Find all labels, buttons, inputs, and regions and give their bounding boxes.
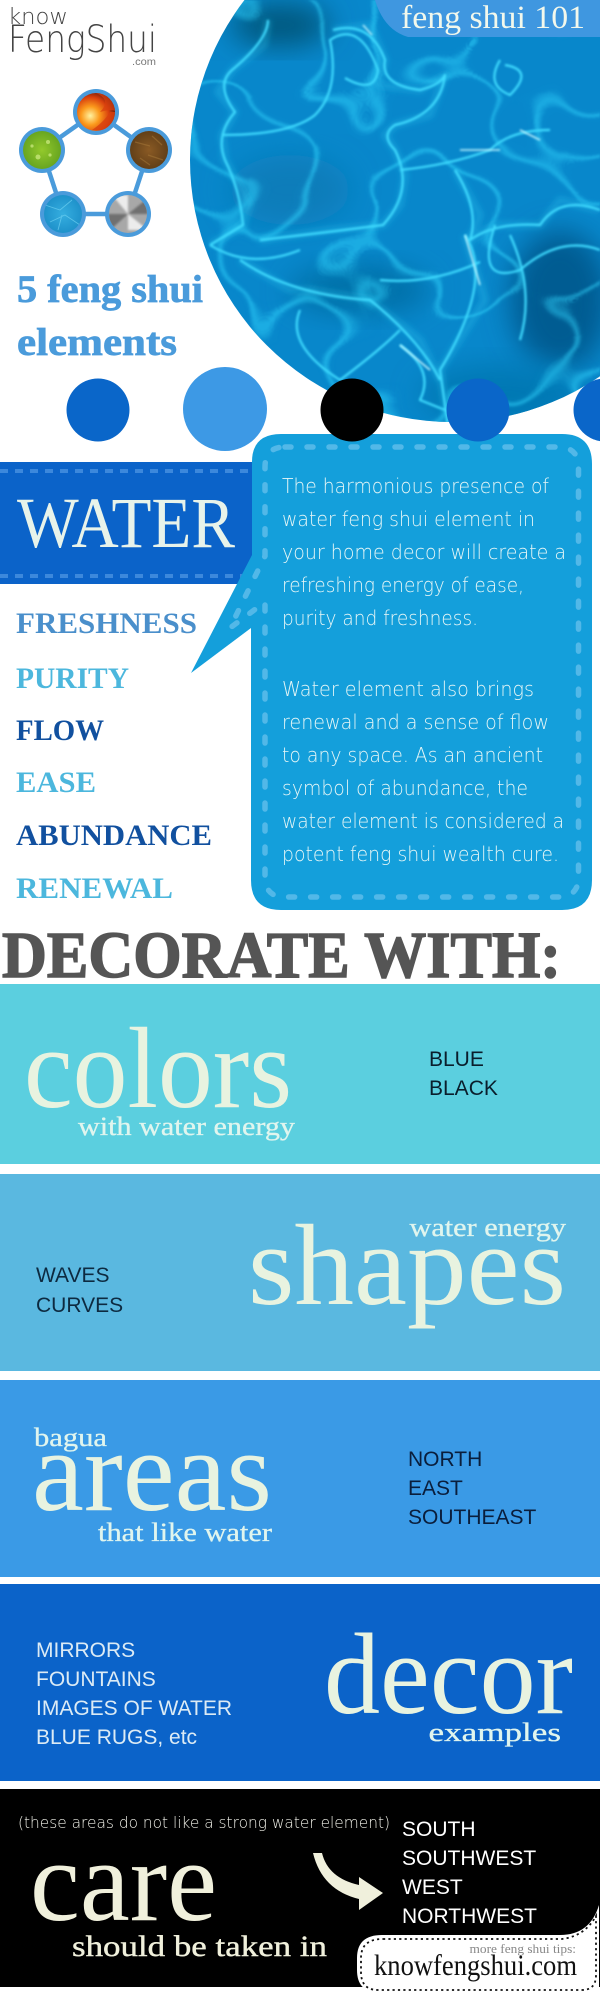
panel: colors: BLACK [429,1077,498,1100]
badge: more tips: more feng shui tips: [470,1941,576,1956]
icon: fire [73,89,119,135]
text: bubble paragraphs: The harmonious presence of [282,474,549,498]
logo: know FengShui: .com [132,57,156,68]
arrow: curved [313,1853,383,1910]
panel: decor: FOUNTAINS [36,1668,156,1691]
panel: colors [0,984,600,1164]
panel: areas: that like water [98,1518,272,1547]
tag: feng shui 101: feng shui 101 [401,0,585,36]
badge: more tips: knowfengshui.com [374,1949,577,1982]
panel: care: NORTHWEST [402,1905,537,1928]
text: bubble paragraphs: symbol of abundance, the [282,776,528,800]
list: water qualities: FLOW [16,714,104,747]
text: bubble paragraphs: potent feng shui wealth cure. [282,842,559,866]
text: bubble paragraphs: Water element also brings [282,677,534,701]
panel: areas: NORTH [408,1448,482,1471]
logo: know FengShui [8,5,157,68]
icon: water [40,191,86,237]
list: water qualities: FRESHNESS [16,607,197,640]
title: 5 feng shui elements: 5 feng shui [17,268,203,311]
speech bubble panel [191,434,592,910]
banner: WATER: WATER [17,483,235,563]
panel: care: SOUTHWEST [402,1847,536,1870]
decorative dots row [66,367,600,451]
logo: know FengShui: FengShui [8,18,157,61]
panel: areas: SOUTHEAST [408,1506,537,1529]
panel: decor: IMAGES OF WATER [36,1697,232,1720]
panel: decor: decor [324,1611,573,1738]
panel: colors: colors [24,1005,292,1132]
list: water qualities: EASE [16,766,96,799]
panel: areas [0,1380,600,1577]
panel: colors: BLUE [429,1048,484,1071]
panel: shapes: CURVES [36,1294,123,1317]
panel: decor: MIRRORS [36,1639,135,1662]
panel: areas: bagua [34,1423,108,1452]
panel: shapes: shapes [248,1202,566,1329]
logo: know FengShui: know [8,5,68,30]
panel: care: should be taken in [72,1930,327,1963]
text: bubble paragraphs [282,474,566,866]
heading: DECORATE WITH: DECORATE WITH: [2,919,561,992]
title: 5 feng shui elements [17,268,203,364]
panel: decor: examples [428,1718,561,1747]
text: bubble paragraphs: water feng shui element in [282,507,535,531]
text: bubble paragraphs: purity and freshness. [282,606,478,630]
text: bubble paragraphs: renewal and a sense of flow [282,710,549,734]
list: water qualities: ABUNDANCE [16,819,212,852]
text: bubble paragraphs: refreshing energy of ease, [282,573,524,597]
water photo circle [180,0,600,440]
text: bubble paragraphs: to any space. As an ancient [282,743,543,767]
panel: shapes: water energy [410,1213,566,1242]
icon: wood leaf [19,127,65,173]
panel: areas: EAST [408,1477,463,1500]
panel: decor [0,1584,600,1781]
badge: more tips [357,1905,599,1992]
panel: care: care [30,1818,217,1945]
panel: care [0,1789,600,1992]
panel: shapes [0,1174,600,1371]
icon: earth [126,127,172,173]
list: water qualities [16,607,212,905]
text: bubble paragraphs: your home decor will create a [282,540,566,564]
icon: five elements pentagon [19,89,172,237]
panel: decor: BLUE RUGS, etc [36,1726,197,1749]
panel: colors: with water energy [78,1112,295,1141]
panel: care: WEST [402,1876,463,1899]
panel: shapes: WAVES [36,1264,110,1287]
title: 5 feng shui elements: elements [17,321,177,364]
list: water qualities: RENEWAL [16,872,173,905]
panel: areas: areas [32,1408,272,1535]
list: water qualities: PURITY [16,662,129,695]
text: bubble paragraphs: water element is considered a [282,809,564,833]
panel: care: SOUTH [402,1818,476,1841]
panel: care: (these areas do not like a strong water element) [18,1813,390,1832]
banner: WATER [0,462,256,584]
icon: metal [105,191,151,237]
